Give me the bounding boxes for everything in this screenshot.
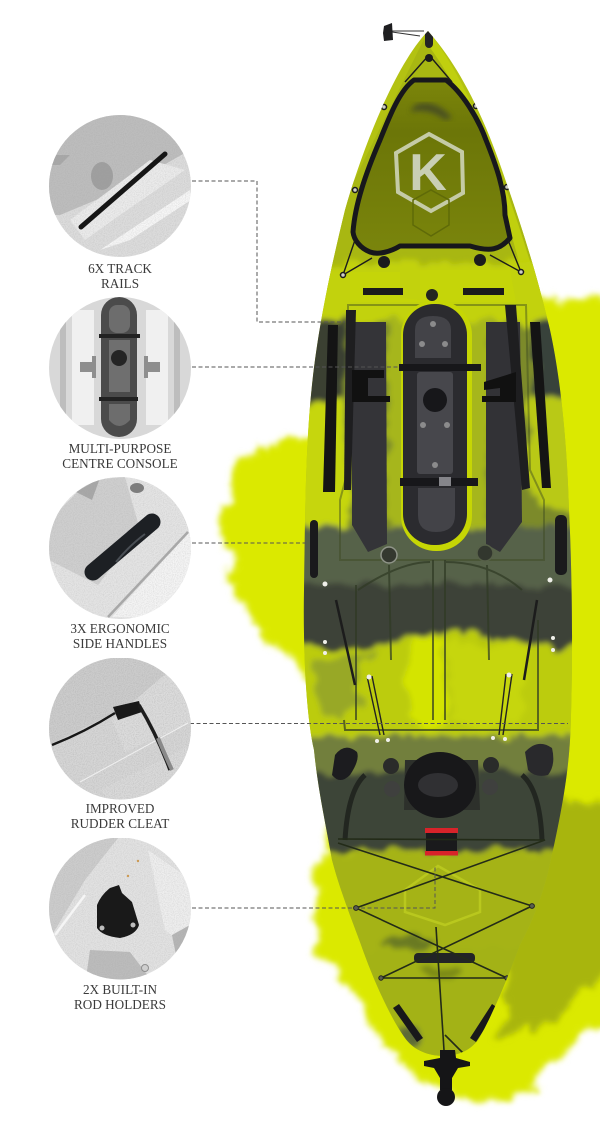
brand K letter: K (409, 144, 447, 202)
bow right edge highlight (428, 31, 530, 264)
kayak (304, 23, 572, 1106)
stern embossed logo (405, 866, 480, 925)
pods in front of cockpit (350, 270, 516, 302)
splash main wash (222, 296, 600, 1100)
console screws (419, 321, 450, 468)
stern bungee anchors (354, 904, 534, 980)
rear hatch handle (418, 773, 458, 797)
leader line: track rails (192, 181, 345, 322)
feature: centre console (49, 297, 191, 471)
leader line: centre console (192, 366, 400, 368)
label: 6X track rails: 6X TRACK (88, 261, 152, 276)
tankwell shade (410, 103, 452, 120)
label: improved rudder cleat: RUDDER CLEAT (71, 816, 169, 831)
rear hatch surround (404, 760, 480, 810)
label: multi-purpose centre console: CENTRE CONSOLE (62, 456, 178, 471)
bow yellow deck (327, 38, 540, 290)
left inner rail (344, 310, 356, 490)
right outer track rail (530, 322, 551, 488)
right inner rail (505, 305, 530, 490)
front deck pad eyes (378, 54, 486, 268)
console top panel (415, 316, 451, 358)
photo circle: centre console (49, 297, 191, 439)
label: improved rudder cleat: IMPROVED (86, 801, 154, 816)
console middle panel (417, 372, 453, 474)
stern bungee web (338, 839, 545, 1055)
splash darker lower right wash (500, 800, 600, 1040)
cockpit recess outline (340, 305, 544, 560)
console lower strap (400, 478, 478, 486)
label: 6X track rails: RAILS (101, 276, 139, 291)
centre console (403, 304, 467, 545)
cockpit knobs (383, 757, 499, 797)
label: 2X built-in rod holders: 2X BUILT-IN (83, 982, 158, 997)
leader line: rudder cleat (190, 722, 568, 724)
right front plate (463, 288, 504, 295)
camouflage paint layer (304, 257, 572, 1056)
deck ridges (344, 560, 538, 730)
left flush rod holder (332, 748, 358, 780)
left seat bracket (352, 370, 390, 402)
console yellow ring (401, 300, 472, 551)
console strap buckle (439, 477, 451, 486)
left outer track rail (323, 325, 338, 492)
front port (426, 289, 438, 301)
right deck cord (499, 674, 512, 735)
right flush rod holder (525, 744, 553, 776)
left cup button (381, 547, 397, 563)
console upper strap (399, 364, 481, 371)
bow hatch net area (353, 80, 510, 253)
right side handle (555, 515, 567, 575)
bow leash cord (392, 31, 424, 36)
feature: side handles (49, 477, 191, 651)
bow carry handle (425, 30, 433, 48)
left rear bungee (336, 600, 355, 685)
leader line: side handles (192, 542, 306, 544)
label: 3X ergonomic side handles: 3X ERGONOMIC (70, 621, 170, 636)
hull base colour (295, 20, 580, 1065)
cockpit well edge (345, 775, 542, 840)
right seat bracket (482, 372, 516, 402)
label: 3X ergonomic side handles: SIDE HANDLES (73, 636, 167, 651)
right cup button (477, 545, 493, 561)
warning label (425, 828, 458, 856)
feature: rod holders (49, 838, 191, 1012)
right rear bungee (524, 600, 537, 680)
right stern plate (470, 1004, 498, 1042)
leader line: rod holders (192, 865, 435, 908)
bow leash block (383, 23, 393, 41)
brand hexagon (396, 134, 463, 211)
front deck line cord (343, 55, 521, 275)
left front plate (363, 288, 403, 295)
photo circle: side handle (49, 477, 191, 619)
yellow paint splash background (222, 296, 600, 1100)
kayak hull (304, 31, 572, 1056)
right foot pad (486, 322, 522, 552)
left foot pad (352, 322, 387, 552)
front anchor screws (340, 104, 524, 278)
console cup hole (423, 388, 447, 412)
feature: rudder cleat (49, 658, 191, 831)
photo circle: rudder cleat (49, 658, 191, 800)
left stern plate (393, 1004, 423, 1042)
rudder assembly (424, 1050, 470, 1106)
photo circle: rod holder (49, 838, 191, 985)
left side handle (310, 520, 318, 578)
feature: track rails (49, 115, 191, 291)
faint embossed hexagon (413, 190, 449, 236)
photo circle: track rail (49, 115, 191, 257)
white screws (322, 578, 555, 743)
label: 2X built-in rod holders: ROD HOLDERS (74, 997, 166, 1012)
stern handle (414, 953, 475, 963)
console bottom panel (418, 488, 455, 532)
rear hatch (404, 752, 476, 818)
left deck cord (367, 676, 384, 735)
label: multi-purpose centre console: MULTI-PURPOSE (69, 441, 171, 456)
